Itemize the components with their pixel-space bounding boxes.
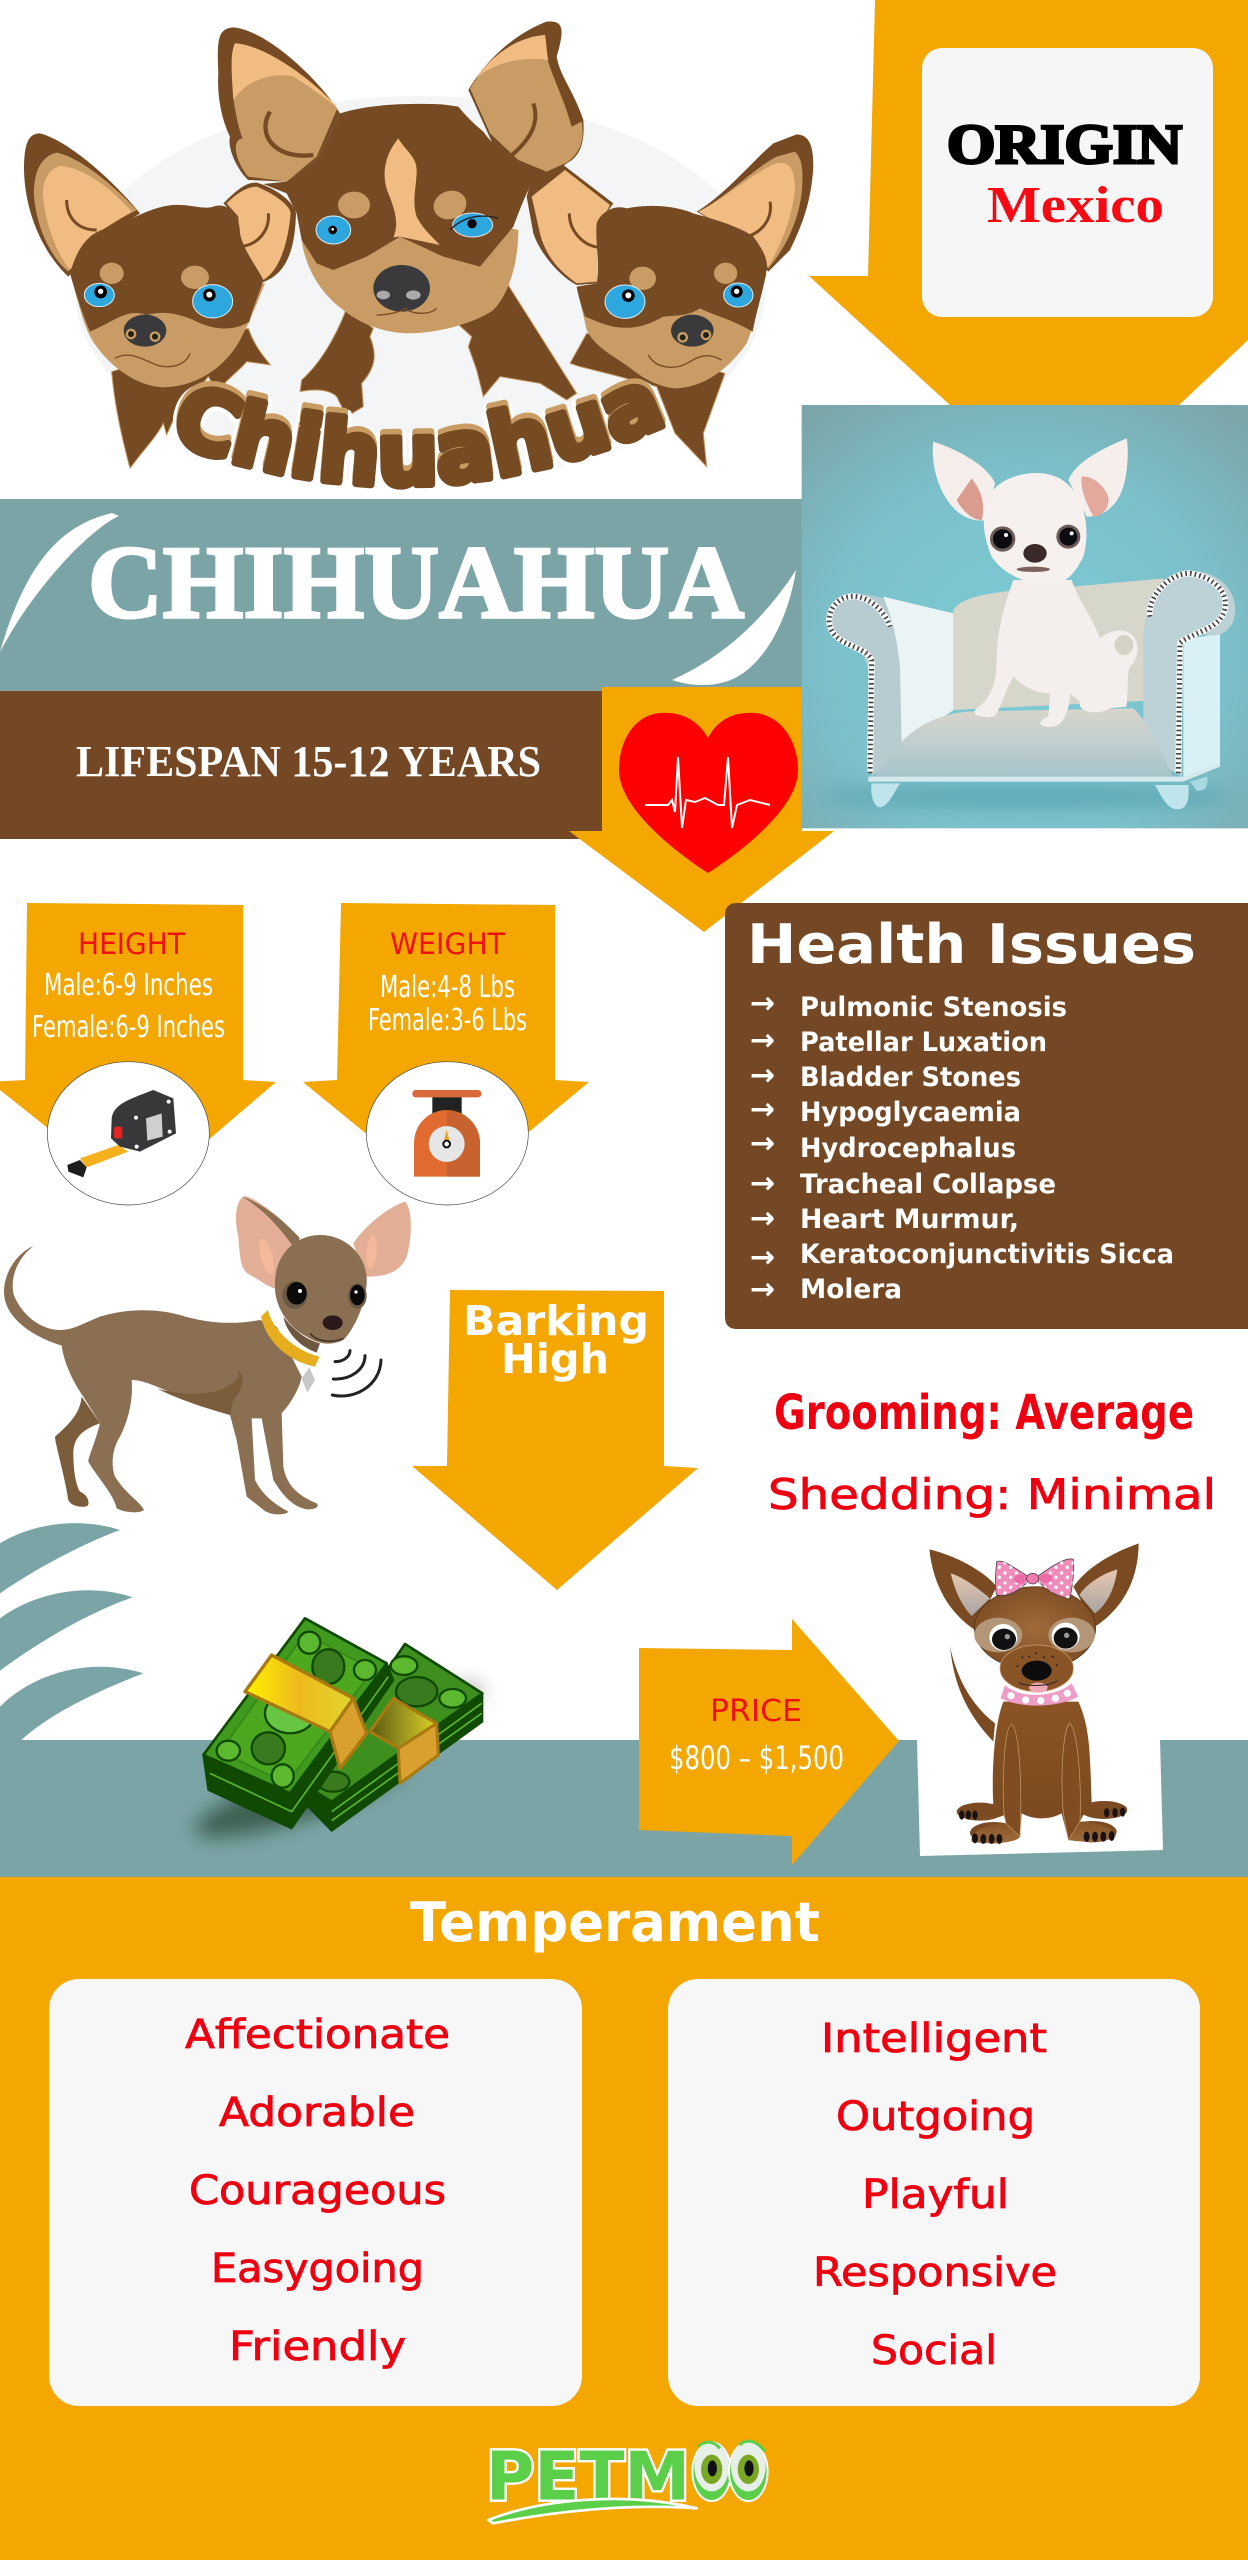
health heading: Health Issues bbox=[747, 913, 1196, 976]
left band bbox=[245, 1655, 367, 1768]
lifespan band bbox=[0, 691, 610, 839]
health list: Bladder Stones bbox=[800, 1062, 1021, 1093]
ears bbox=[218, 27, 340, 182]
height text: Male:6-9 Inches bbox=[44, 968, 213, 1003]
price text bbox=[669, 1694, 844, 1777]
ears bbox=[236, 1196, 300, 1288]
health list bbox=[800, 992, 1174, 1305]
legs bbox=[300, 308, 374, 417]
armchair bbox=[828, 572, 1235, 809]
health list: Keratoconjunctivitis Sicca bbox=[800, 1239, 1174, 1270]
barking text bbox=[463, 1297, 649, 1383]
barking text: Barking bbox=[463, 1297, 649, 1345]
logo wordmark: Chihuahua bbox=[172, 378, 669, 490]
left card bbox=[49, 1979, 582, 2406]
right card: Playful bbox=[862, 2172, 1009, 2218]
lower face bbox=[302, 200, 518, 333]
weight text: Female:3-6 Lbs bbox=[368, 1003, 527, 1038]
price arrow bbox=[639, 1619, 899, 1865]
health list arrows: → bbox=[750, 1272, 775, 1307]
icon: kitchen scale bbox=[366, 1062, 528, 1205]
nose bbox=[124, 315, 166, 347]
origin value: Mexico bbox=[987, 177, 1164, 234]
paws bbox=[957, 1801, 1127, 1843]
logo: PETMOO bbox=[486, 2437, 768, 2523]
right dog bbox=[527, 134, 813, 467]
left dog bbox=[24, 133, 296, 468]
white dog bbox=[933, 438, 1137, 727]
barking dog bbox=[4, 1196, 411, 1514]
icon: heart with pulse bbox=[619, 713, 798, 873]
barking arrow bbox=[412, 1290, 698, 1590]
logo: three chihuahua heads bbox=[24, 22, 814, 490]
height arrow bbox=[0, 903, 276, 1200]
photo: white chihuahua on armchair bbox=[802, 405, 1248, 828]
temperament heading: Temperament bbox=[410, 1891, 820, 1954]
weight text bbox=[368, 927, 527, 1038]
height text bbox=[32, 927, 225, 1045]
weight text: Male:4-8 Lbs bbox=[380, 970, 515, 1005]
health list arrows bbox=[750, 986, 775, 1307]
nose bbox=[671, 315, 714, 347]
lifespan text: LIFESPAN 15-12 YEARS bbox=[76, 737, 541, 786]
health list arrows: → bbox=[750, 1166, 775, 1201]
weight arrow bbox=[303, 903, 589, 1200]
health list: Heart Murmur, bbox=[800, 1204, 1019, 1235]
logo wordmark bbox=[172, 378, 669, 490]
collar bbox=[1001, 1683, 1078, 1706]
cartoon dog with pink bow bbox=[929, 1543, 1139, 1844]
left card: Friendly bbox=[229, 2324, 406, 2370]
health list arrows: → bbox=[750, 1023, 775, 1058]
health list: Hypoglycaemia bbox=[800, 1097, 1021, 1128]
health list: Tracheal Collapse bbox=[800, 1169, 1056, 1200]
brown mask bbox=[263, 104, 530, 270]
brows bbox=[629, 263, 737, 290]
shedding text: Shedding: Minimal bbox=[768, 1470, 1216, 1519]
logo backdrop circle bbox=[75, 96, 765, 484]
barking text: High bbox=[501, 1335, 609, 1383]
left card: Courageous bbox=[189, 2168, 446, 2214]
eyes bbox=[989, 1623, 1080, 1651]
health list: Patellar Luxation bbox=[800, 1027, 1047, 1058]
body bbox=[957, 1702, 1127, 1843]
blaze bbox=[385, 138, 440, 245]
origin arrow bbox=[809, 0, 1248, 406]
icon: tape measure bbox=[47, 1062, 209, 1205]
height text: HEIGHT bbox=[78, 927, 185, 961]
white photo patch behind cartoon dog bbox=[917, 1740, 1163, 1856]
origin card bbox=[922, 48, 1213, 317]
decorative teal swooshes bbox=[0, 1523, 143, 1741]
sound waves bbox=[332, 1351, 381, 1396]
health list: Hydrocephalus bbox=[800, 1133, 1016, 1164]
nose bbox=[373, 265, 430, 312]
right card: Social bbox=[871, 2328, 997, 2374]
eyes bbox=[282, 1281, 367, 1309]
bottom teal band bbox=[0, 1740, 1248, 1877]
left card: Easygoing bbox=[211, 2246, 424, 2292]
left card: Affectionate bbox=[185, 2012, 450, 2058]
origin heading: ORIGIN bbox=[947, 114, 1182, 176]
muzzle bbox=[1000, 1645, 1073, 1693]
collar bbox=[261, 1310, 319, 1367]
right stack bbox=[307, 1644, 482, 1831]
left stack bbox=[203, 1618, 393, 1828]
right band bbox=[370, 1698, 438, 1783]
right swoosh bbox=[672, 570, 796, 685]
health list arrows: → bbox=[750, 1201, 775, 1236]
logo underline swoosh bbox=[488, 2499, 697, 2523]
health list arrows: → bbox=[750, 1092, 775, 1127]
health list arrows: → bbox=[750, 1126, 775, 1161]
title band bbox=[0, 499, 802, 691]
eyes bbox=[84, 283, 233, 318]
brows bbox=[338, 186, 470, 224]
height text: Female:6-9 Inches bbox=[32, 1010, 225, 1045]
eyes bbox=[316, 213, 498, 244]
right card bbox=[668, 1979, 1200, 2406]
panel: health issues bbox=[725, 903, 1248, 1329]
logo: PETMOO: OO bbox=[692, 2437, 768, 2515]
health list arrows: → bbox=[750, 1240, 775, 1275]
left swoosh bbox=[0, 513, 119, 652]
logo eyes bbox=[692, 2441, 768, 2501]
weight text: WEIGHT bbox=[390, 927, 505, 961]
center dog bbox=[218, 21, 584, 417]
heart arrow bbox=[569, 687, 834, 932]
head bbox=[275, 1235, 367, 1344]
head bbox=[974, 1587, 1096, 1670]
bow bbox=[995, 1559, 1074, 1598]
logo: PETMOO: PETM bbox=[486, 2437, 690, 2515]
price text: PRICE bbox=[710, 1694, 802, 1729]
health list arrows: → bbox=[750, 1058, 775, 1093]
eyes bbox=[605, 283, 753, 318]
health list: Pulmonic Stenosis bbox=[800, 992, 1067, 1023]
health list arrows: → bbox=[750, 986, 775, 1021]
health list: Molera bbox=[800, 1274, 902, 1305]
title: CHIHUAHUA bbox=[88, 525, 744, 640]
icon: stacks of money bbox=[188, 1618, 490, 1853]
panel: temperament bbox=[0, 1877, 1248, 2560]
floor shadow bbox=[820, 786, 1233, 807]
brows bbox=[100, 263, 209, 289]
price text: $800 – $1,500 bbox=[669, 1739, 844, 1777]
right card: Outgoing bbox=[836, 2094, 1035, 2140]
left card: Adorable bbox=[219, 2090, 415, 2136]
right card: Intelligent bbox=[821, 2016, 1047, 2062]
right card: Responsive bbox=[813, 2250, 1057, 2296]
